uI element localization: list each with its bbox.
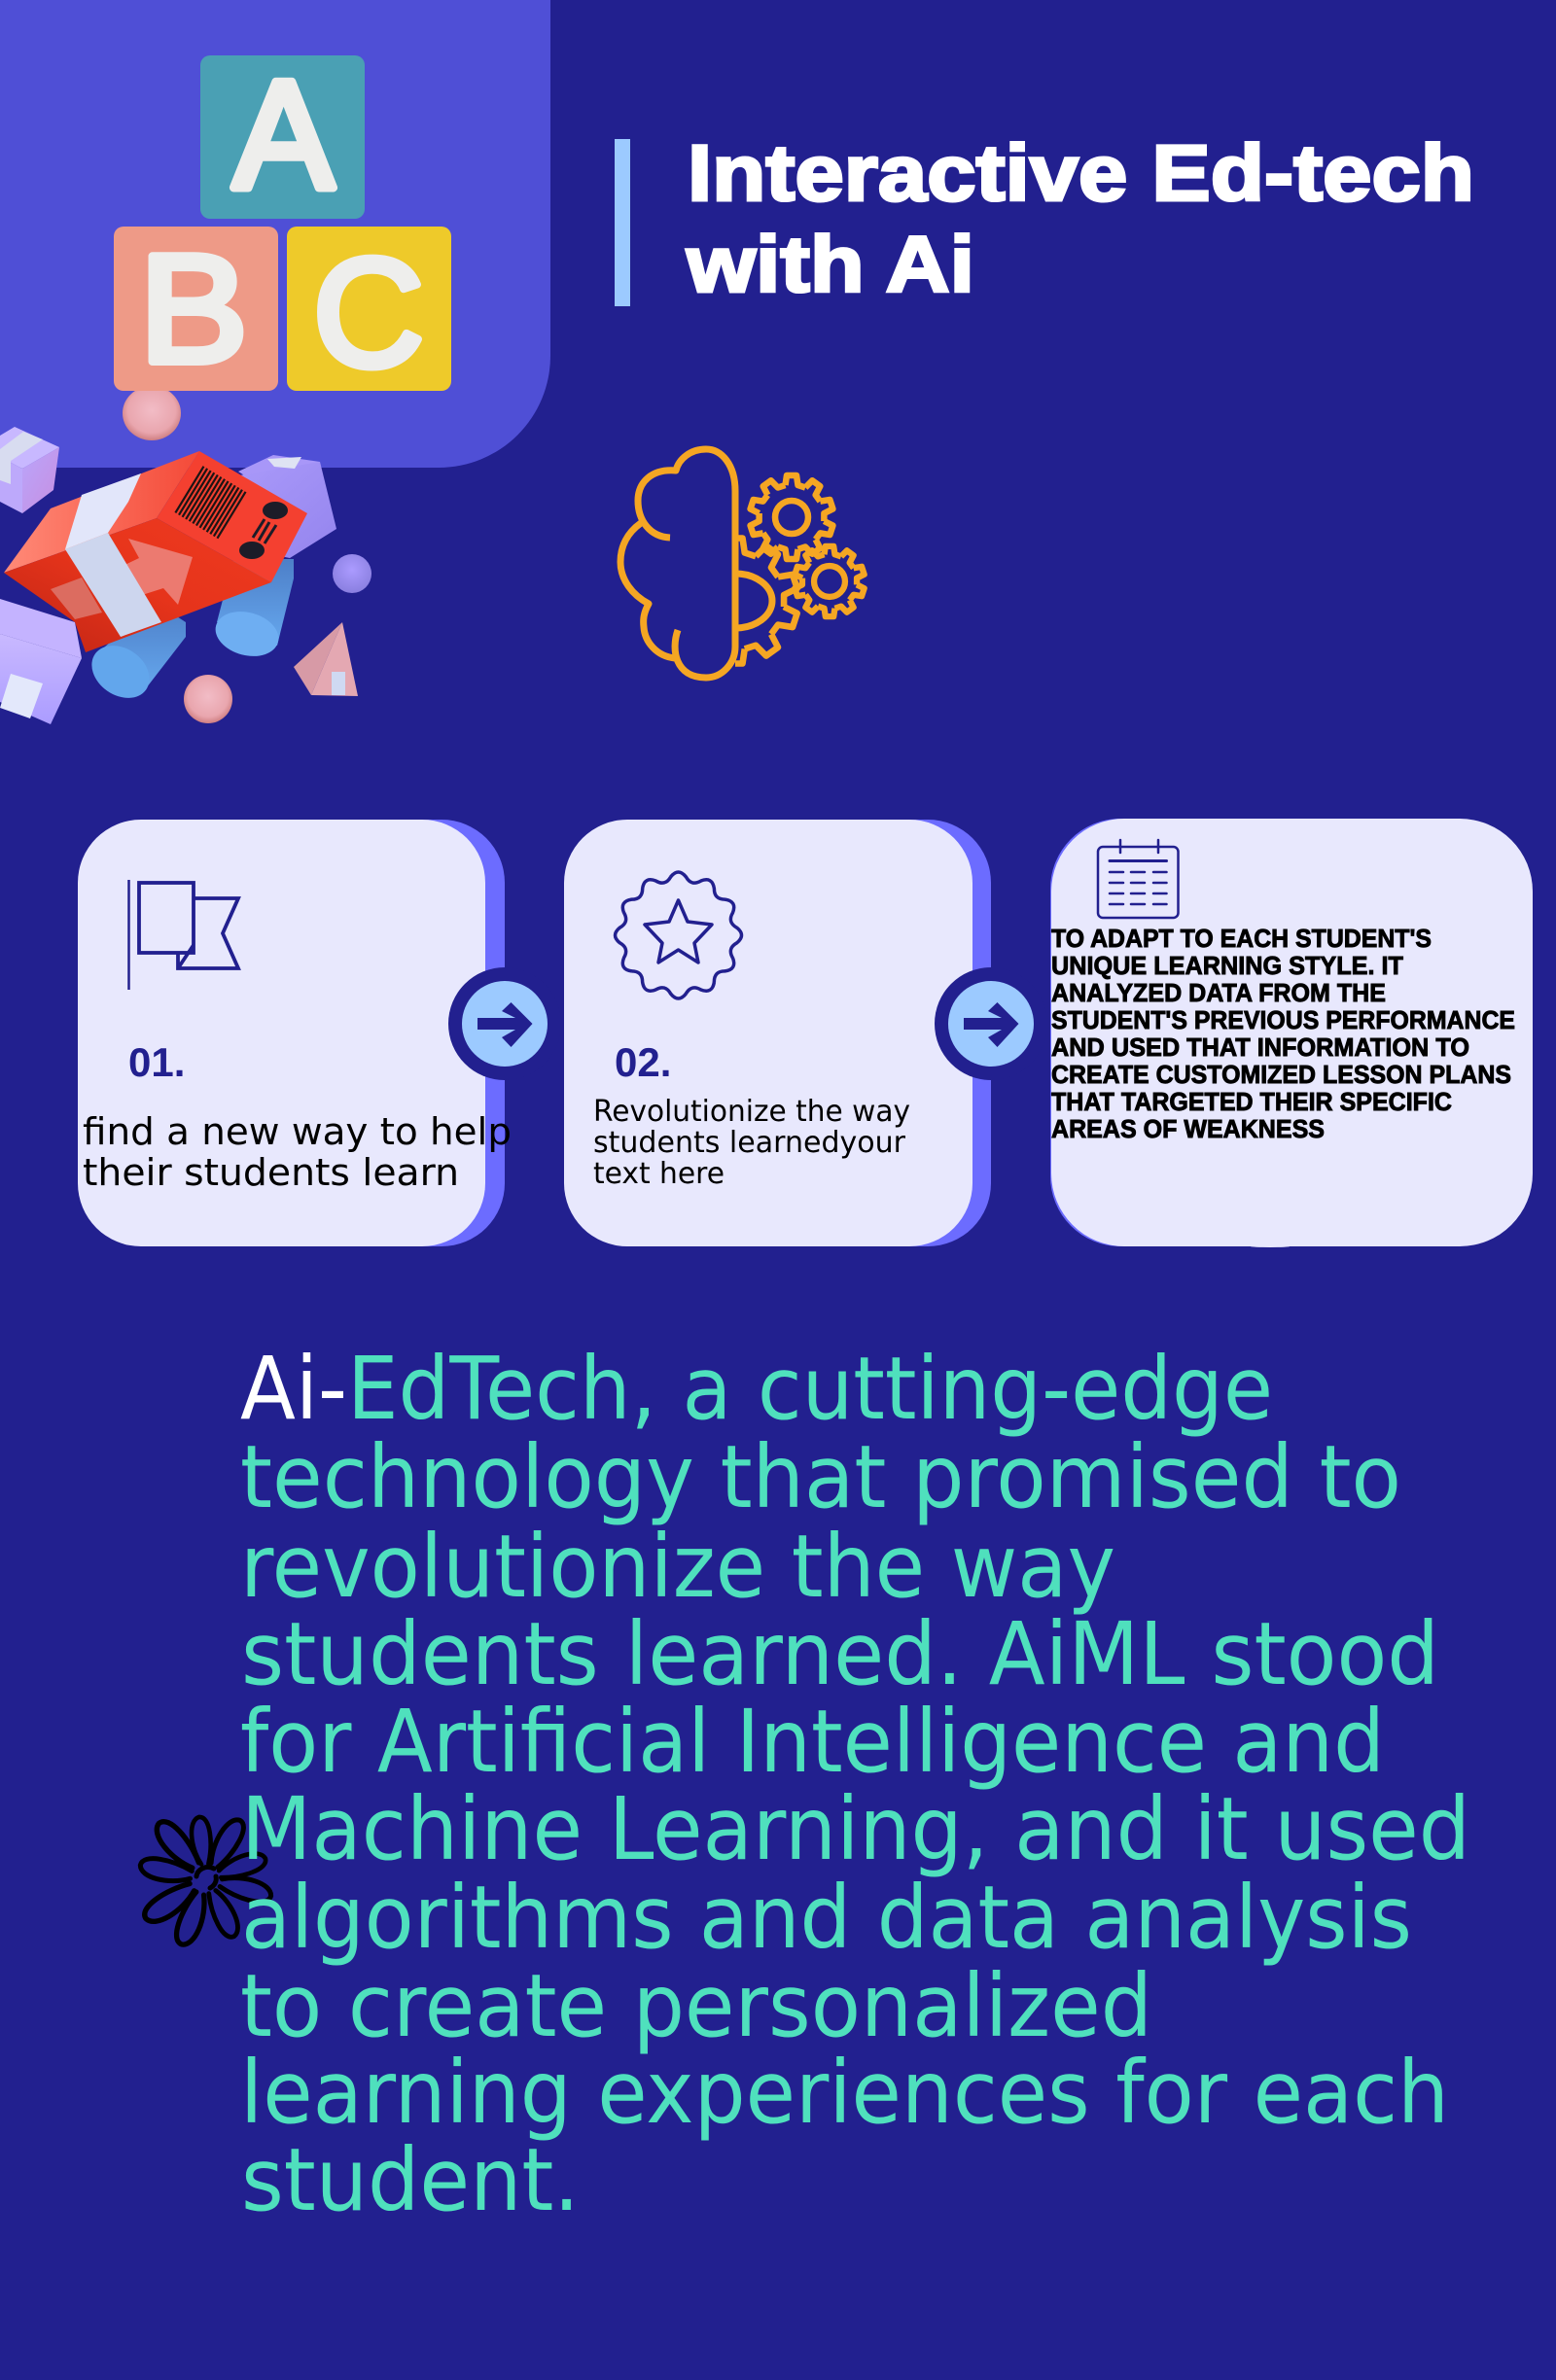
block C (287, 227, 451, 399)
arrow button 2 (935, 967, 1047, 1080)
main paragraph: Machine Learning, and it used (241, 1778, 1470, 1879)
violet ball (333, 554, 371, 593)
panel: card 1 (78, 820, 512, 1246)
card 3 body (1051, 819, 1533, 1246)
main paragraph (240, 1338, 1470, 2230)
card 1 text (83, 1110, 512, 1194)
block B (114, 224, 278, 395)
illustration: 3D boxes and shapes (0, 427, 371, 724)
half gear in brain (735, 535, 800, 667)
card 1 text: their students learn (83, 1151, 459, 1194)
card 1 text: find a new way to help (83, 1110, 512, 1153)
blue cylinder right (210, 559, 294, 663)
main paragraph: learning experiences for each (240, 2042, 1449, 2143)
panel: card 3 (1050, 819, 1533, 1247)
main paragraph: student. (241, 2129, 580, 2230)
block B: B (139, 224, 248, 395)
card 3 text: STUDENT'S PREVIOUS PERFORMANCE (1051, 1007, 1515, 1034)
block C: C (313, 228, 424, 399)
card 3 edge highlight (1050, 819, 1342, 1246)
arrow button 1 (448, 967, 561, 1080)
main paragraph: technology that promised to (240, 1426, 1401, 1527)
card 3 text (1051, 926, 1515, 1143)
card 3 text: AND USED THAT INFORMATION TO (1051, 1034, 1469, 1062)
card 3 text: THAT TARGETED THEIR SPECIFIC (1051, 1089, 1452, 1116)
step number 02: 02. (615, 1039, 671, 1085)
icon: flag (128, 880, 238, 990)
main paragraph: to create personalized (240, 1955, 1152, 2056)
card 3 text: CREATE CUSTOMIZED LESSON PLANS (1051, 1062, 1511, 1089)
card 2 body (564, 820, 972, 1246)
icon: pink ball behind blocks (123, 386, 181, 440)
icon: star badge (613, 869, 744, 1001)
icon: calendar (1098, 840, 1179, 918)
card 2 text: Revolutionize the way (593, 1095, 910, 1129)
card 1 shadow (97, 820, 505, 1246)
card 1 body (78, 820, 485, 1246)
pink pyramid (294, 622, 358, 696)
card 3 text: ANALYZED DATA FROM THE (1051, 980, 1386, 1007)
icon: black flower doodle (138, 1815, 273, 1948)
card 3 text: AREAS OF WEAKNESS (1051, 1116, 1325, 1143)
card 2 shadow (584, 820, 991, 1246)
panel: card 2 (564, 820, 991, 1246)
main paragraph: students learned. AiML stood (241, 1603, 1439, 1704)
card 2 text: text here (593, 1157, 725, 1191)
upper gear (748, 475, 835, 559)
barcode (189, 489, 233, 516)
block A: A (233, 50, 335, 221)
card 3 bottom bump (1251, 1245, 1290, 1247)
card 3 text: UNIQUE LEARNING STYLE. IT (1051, 953, 1403, 980)
icon: ABC blocks (114, 50, 451, 399)
pink ball (184, 675, 232, 723)
large purple box behind (224, 455, 336, 558)
red box (4, 451, 307, 652)
title (686, 129, 1474, 309)
card 2 text (593, 1095, 910, 1191)
large purple box bottom left (0, 599, 82, 724)
panel: top-left header block (0, 0, 550, 468)
main paragraph: for Artificial Intelligence and (240, 1691, 1385, 1792)
main paragraph: revolutionize the way (240, 1516, 1115, 1617)
title: Interactive Ed-tech (688, 129, 1474, 218)
brain half (620, 449, 735, 678)
main paragraph: Ai-EdTech, a cutting-edge (240, 1338, 1273, 1439)
title: with Ai (686, 221, 974, 309)
title accent bar (615, 139, 630, 306)
lower gear (793, 546, 866, 616)
small purple box top left (0, 427, 59, 513)
main paragraph: algorithms and data analysis (241, 1867, 1412, 1968)
icon: brain with gears (620, 449, 866, 678)
blue cylinder left (82, 603, 186, 709)
tape (65, 533, 161, 637)
block A (200, 50, 365, 221)
step number 01: 01. (128, 1039, 185, 1085)
card 3 text: TO ADAPT TO EACH STUDENT'S (1051, 926, 1432, 953)
arrow print on box (51, 578, 102, 619)
card 2 text: students learnedyour (593, 1126, 906, 1160)
